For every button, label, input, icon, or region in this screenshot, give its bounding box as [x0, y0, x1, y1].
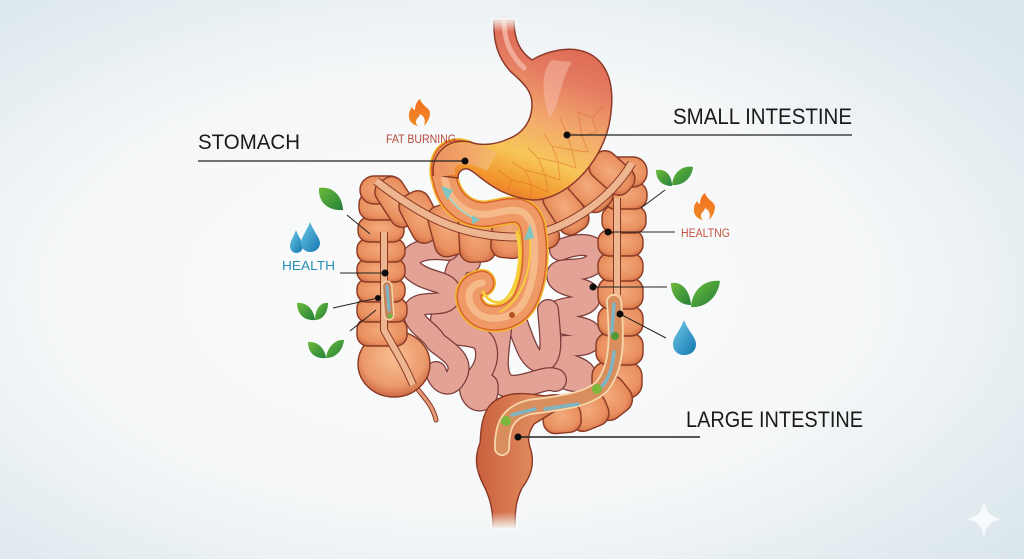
stomach: [433, 18, 612, 200]
duodenum tube: [441, 152, 535, 318]
label: health: HEALTH: [282, 258, 335, 273]
ascending colon: [357, 318, 407, 346]
pyloric arch: [444, 154, 492, 176]
label: small intestine: SMALL INTESTINE: [673, 104, 852, 129]
icon: leaves, left: [297, 303, 328, 320]
esophagus and stomach body: [433, 20, 612, 200]
stomach sheen: [544, 60, 572, 118]
large intestine: colon segments: [357, 146, 647, 529]
rectum: [476, 392, 590, 527]
rugae texture: [498, 105, 604, 197]
outer yellow wall: [443, 152, 535, 318]
label: healing: HEALTNG: [681, 228, 730, 240]
icon: leaves, lower left: [308, 340, 344, 358]
inner duodenum channel: [483, 232, 519, 302]
leader dots: [375, 132, 624, 440]
taenia band: [376, 163, 632, 237]
icon: leaves, upper right: [656, 167, 693, 186]
leader lines: [198, 135, 852, 437]
icon: leaf, upper left: [319, 188, 343, 210]
label: large intestine: LARGE INTESTINE: [686, 407, 863, 432]
icon: sparkle watermark: [966, 500, 1002, 538]
icon: flame, healing: [694, 193, 715, 220]
inner lumen: right to rectum: [502, 302, 616, 448]
descending colon: [592, 362, 642, 398]
inner lumen: left: [387, 286, 389, 315]
esophagus highlight: [504, 20, 524, 68]
sigmoid colon: [582, 370, 638, 426]
icon: water drop, right: [673, 320, 696, 355]
label: stomach: STOMACH: [198, 131, 300, 154]
esophagus top fade: [490, 18, 518, 32]
label: fat burning: FAT BURNING: [386, 134, 456, 146]
icon: leaves, middle right: [671, 281, 720, 307]
fade at rectum end: [490, 512, 518, 529]
appendix: [413, 382, 436, 420]
icon: flame, fat burning: [409, 99, 430, 126]
flow arrow: duodenum curve: [445, 190, 478, 220]
small intestine: [410, 245, 597, 400]
cecum: [358, 331, 430, 397]
icon: water drops, health: [290, 222, 320, 253]
transverse colon: [370, 172, 424, 232]
